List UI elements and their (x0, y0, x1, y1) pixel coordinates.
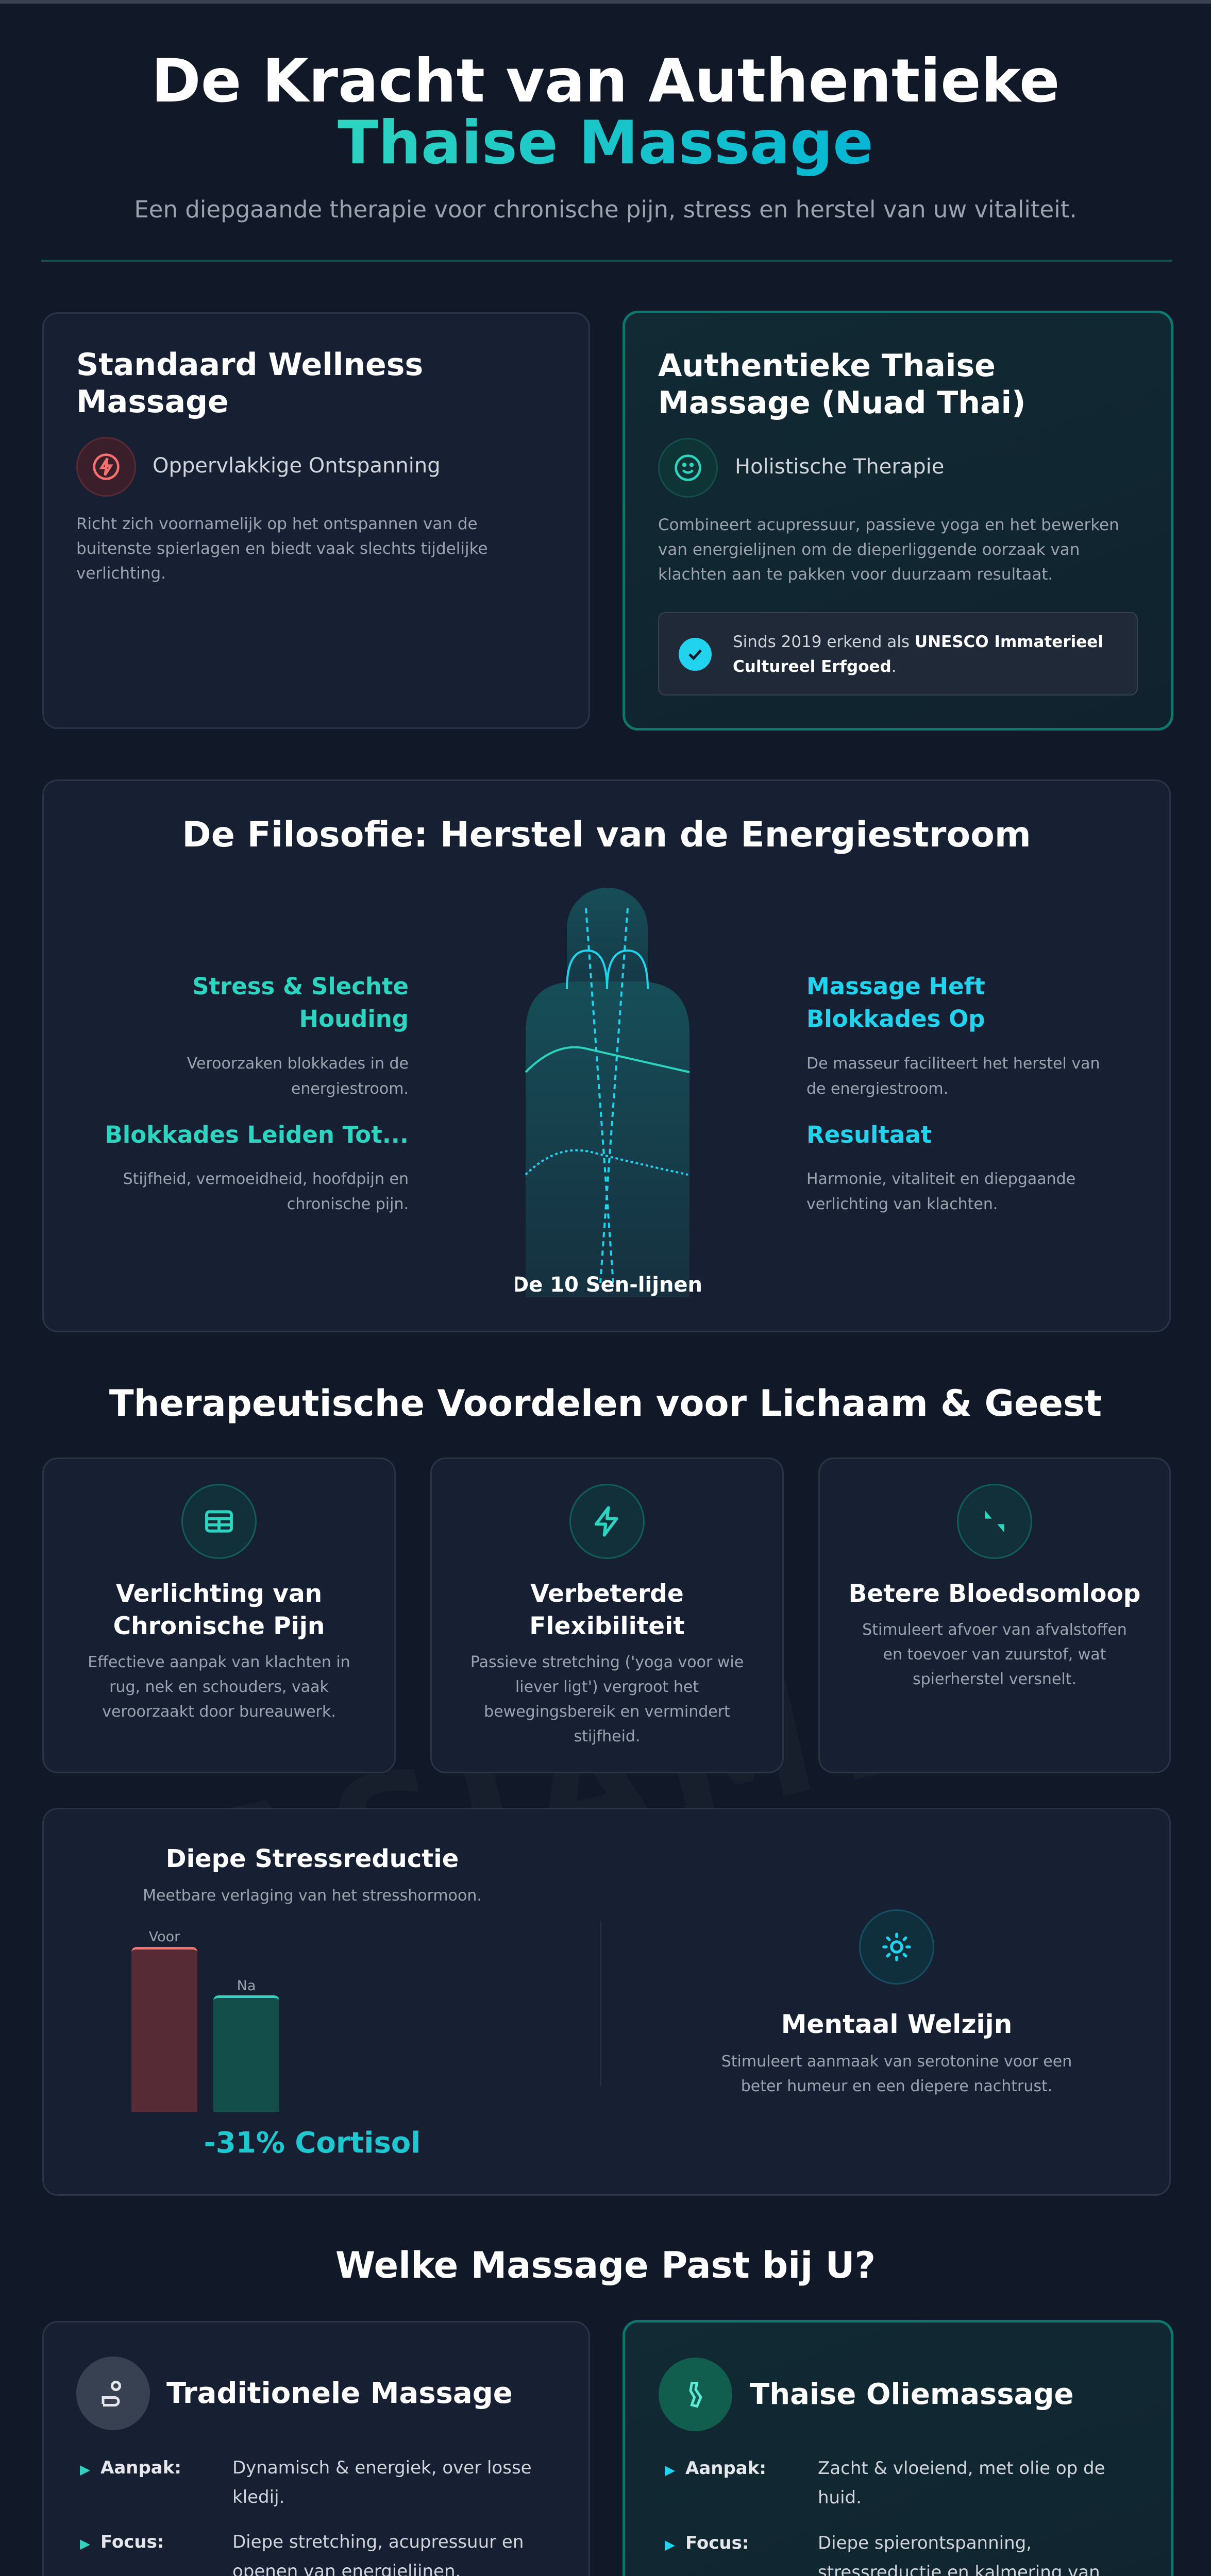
description: klachten aan te pakken voor duurzaam resultaat. (658, 565, 1053, 584)
panel: philosophy: Stijfheid, vermoeidheid, hoofdpijn en (123, 1170, 409, 1188)
text: stress: Stress & Slechte (192, 973, 409, 1000)
icon: arrows (957, 1484, 1032, 1559)
list: Focus: (100, 2532, 164, 2552)
icon: sun (859, 1909, 934, 1985)
panel: stress reduction: Meetbare verlaging van het stresshormoon. (143, 1887, 482, 1905)
description: buitenste spierlagen en biedt vaak slechts tijdelijke (76, 539, 488, 558)
heading: Authentieke Thaise (658, 348, 996, 384)
panel: philosophy: de energiestroom. (806, 1080, 948, 1098)
list: Diepe spierontspanning, (818, 2533, 1032, 2553)
panel: circulation: Betere Bloedsomloop (849, 1580, 1140, 1608)
panel: chronic pain: veroorzaakt door bureauwerk. (102, 1703, 336, 1721)
icon: table (181, 1484, 257, 1559)
list: ▶ (80, 2536, 90, 2552)
text: stress: Houding (299, 1005, 409, 1032)
list: ▶ (665, 2537, 675, 2553)
panel: chronic pain: rug, nek en schouders, vaak (109, 1678, 329, 1696)
heading (76, 347, 423, 420)
description (76, 515, 488, 583)
panel: traditional (42, 2321, 590, 2576)
panel: chronic pain: Chronische Pijn (113, 1612, 325, 1640)
list: Dynamisch & energiek, over losse (232, 2458, 532, 2478)
list: Zacht & vloeiend, met olie op de (818, 2458, 1105, 2479)
panel: traditional: Traditionele Massage (166, 2377, 513, 2410)
title: De Kracht van Authentieke (152, 46, 1059, 116)
heading: Standaard Wellness (76, 347, 423, 383)
text: stress (192, 973, 409, 1032)
panel: philosophy: De masseur faciliteert het herstel van (806, 1055, 1100, 1073)
chart: body sen lines: De 10 Sen-lijnen (515, 1273, 701, 1297)
text: resultaat: Resultaat (806, 1121, 932, 1148)
heading: Massage (Nuad Thai) (658, 385, 1025, 421)
panel: standard wellness (42, 312, 590, 729)
description: Combineert acupressuur, passieve yoga en het bewerken (658, 516, 1119, 534)
panel: stress reduction: Diepe Stressreductie (166, 1844, 459, 1873)
panel: chronic pain: Verlichting van (116, 1580, 322, 1608)
chart: body sen lines (515, 888, 701, 1297)
list: kledij. (232, 2487, 284, 2507)
description: van energielijnen om de dieperliggende oorzaak van (658, 540, 1080, 559)
panel: philosophy: energiestroom. (291, 1080, 409, 1098)
title: Thaise Massage (338, 108, 873, 178)
description: Richt zich voornamelijk op het ontspannen van de (76, 515, 478, 533)
panel: circulation: en toevoer van zuurstof, wat (883, 1646, 1106, 1664)
list: ▶ (80, 2462, 90, 2478)
panel: circulation (818, 1458, 1171, 1773)
panel: flexibility: Verbeterde (530, 1580, 684, 1608)
panel: oil massage (623, 2320, 1173, 2576)
list: huid. (818, 2487, 862, 2508)
heading: De Filosofie: Herstel van de Energiestroom (182, 815, 1031, 855)
panel: stress reduction: Stimuleert aanmaak van serotonine voor een (721, 2053, 1072, 2071)
panel: flexibility: stijfheid. (574, 1727, 640, 1745)
panel: circulation: spierherstel versnelt. (913, 1670, 1077, 1688)
icon: bottle (659, 2358, 732, 2431)
stat: -31% Cortisol (204, 2126, 421, 2160)
watermark: NASIAM.BE (43, 1570, 1168, 1995)
callout: unesco: Cultureel Erfgoed. (733, 657, 897, 676)
title (152, 46, 1059, 178)
text: massage (806, 973, 985, 1032)
list: Diepe stretching, acupressuur en (232, 2532, 524, 2552)
list: Aanpak: (685, 2458, 766, 2479)
heading (658, 348, 1025, 421)
panel: stress reduction (42, 1808, 1171, 2196)
callout: unesco: Sinds 2019 erkend als UNESCO Immaterieel (733, 633, 1103, 651)
icon: bolt (569, 1484, 645, 1559)
panel: chronic pain (42, 1458, 396, 1773)
list: Focus: (685, 2533, 749, 2553)
panel: philosophy (42, 779, 1171, 1332)
panel: philosophy: Veroorzaken blokkades in de (187, 1055, 409, 1073)
icon: person (76, 2357, 150, 2430)
panel: flexibility: liever ligt') vergroot het (515, 1678, 699, 1696)
bar chart: Na (237, 1978, 256, 1994)
list: Aanpak: (100, 2458, 181, 2478)
heading: benefits: Therapeutische Voordelen voor Lichaam & Geest (109, 1382, 1102, 1425)
text: blokkades: Blokkades Leiden Tot... (105, 1121, 409, 1148)
icon: superficial (76, 437, 136, 497)
panel: circulation: Stimuleert afvoer van afvalstoffen (862, 1621, 1127, 1639)
heading: Massage (76, 384, 229, 420)
icon: smile (658, 438, 718, 498)
panel: oil massage: Thaise Oliemassage (750, 2378, 1074, 2411)
description: verlichting. (76, 564, 166, 583)
panel: flexibility: bewegingsbereik en vermindert (484, 1703, 730, 1721)
panel: philosophy: Harmonie, vitaliteit en diepgaande (806, 1170, 1075, 1188)
bar chart (131, 1929, 279, 2112)
panel: chronic pain: Effectieve aanpak van klachten in (88, 1653, 350, 1671)
list: ▶ (665, 2463, 675, 2478)
text: massage: Massage Heft (806, 973, 985, 1000)
panel: authentic thai (623, 311, 1173, 731)
panel: flexibility (430, 1458, 784, 1773)
text: massage: Blokkades Op (806, 1005, 985, 1032)
panel: flexibility: Flexibiliteit (529, 1612, 685, 1640)
heading: which massage: Welke Massage Past bij U? (335, 2244, 876, 2286)
label: Oppervlakkige Ontspanning (153, 454, 441, 478)
list (80, 2458, 532, 2576)
panel: philosophy: chronische pijn. (287, 1195, 409, 1213)
panel: stress reduction: Mentaal Welzijn (781, 2009, 1012, 2039)
label: Holistische Therapie (735, 455, 944, 479)
subtitle: Een diepgaande therapie voor chronische pijn, stress en herstel van uw vitaliteit. (134, 196, 1077, 223)
callout: unesco (658, 612, 1138, 696)
list (665, 2458, 1105, 2576)
description (658, 516, 1119, 584)
panel: flexibility: Passieve stretching ('yoga voor wie (470, 1653, 744, 1671)
panel: philosophy: verlichting van klachten. (806, 1195, 998, 1213)
bar chart: Voor (149, 1929, 180, 1945)
panel: stress reduction: beter humeur en een diepere nachtrust. (741, 2077, 1052, 2095)
